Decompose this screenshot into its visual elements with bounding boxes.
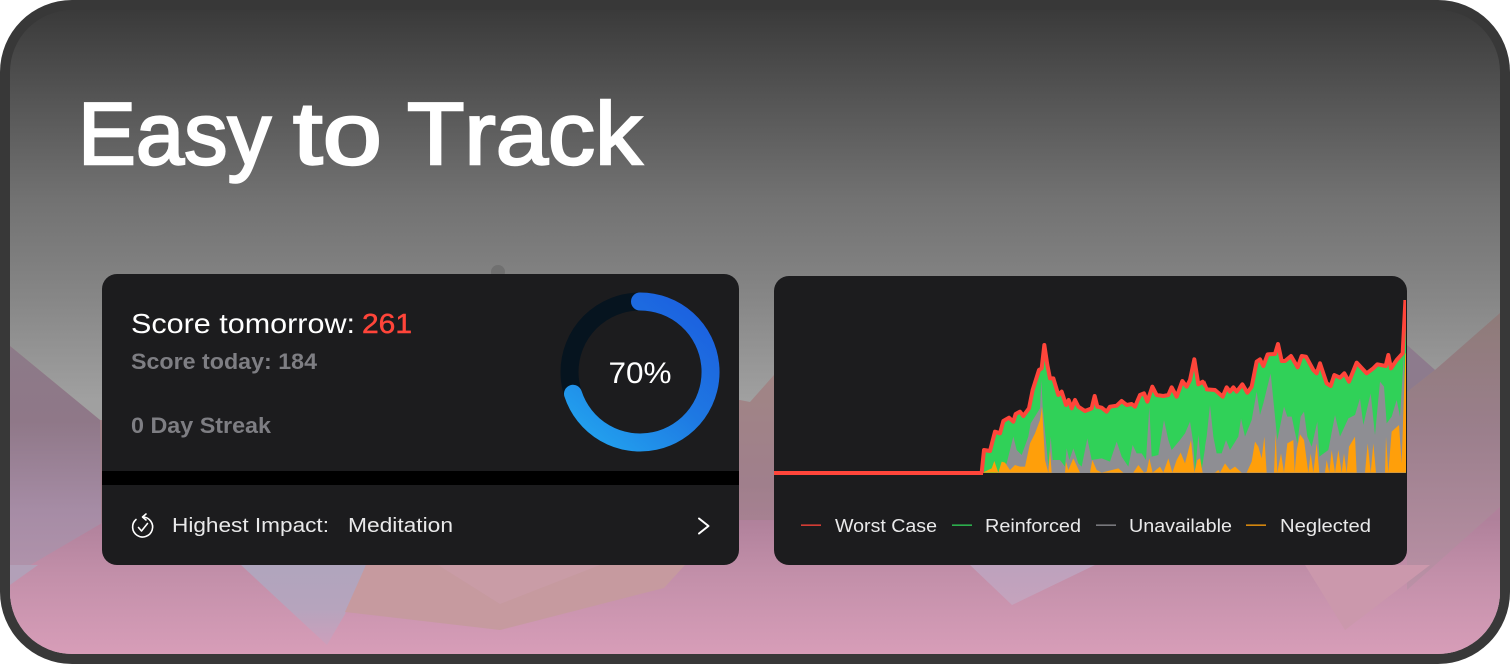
legend label: worst case: Worst Case — [835, 515, 937, 536]
panel: stacked area chart — [774, 276, 1407, 565]
title — [78, 84, 643, 183]
baseline — [774, 471, 983, 475]
title: to — [293, 84, 382, 183]
score tomorrow value: 261 — [362, 308, 412, 339]
title: Track — [407, 84, 643, 183]
title: Easy — [78, 84, 271, 183]
icon: timer check — [133, 514, 153, 537]
score tomorrow: Score tomorrow: — [131, 308, 355, 339]
highest impact value: Meditation — [348, 515, 453, 537]
icon: chevron — [699, 518, 708, 534]
ring percentage: 70% — [608, 357, 672, 390]
legend label: neglected: Neglected — [1280, 515, 1371, 536]
day streak: 0 Day Streak — [131, 413, 272, 438]
legend label: unavailable: Unavailable — [1129, 515, 1232, 536]
legend label: reinforced: Reinforced — [985, 515, 1081, 536]
panel: score card — [102, 274, 739, 565]
score today: Score today: 184 — [131, 349, 318, 374]
legend — [801, 515, 1371, 536]
progress ring — [570, 302, 711, 443]
highest impact label: Highest Impact: — [172, 515, 329, 537]
chart areas left — [980, 343, 1205, 474]
chart areas right — [1205, 300, 1406, 473]
